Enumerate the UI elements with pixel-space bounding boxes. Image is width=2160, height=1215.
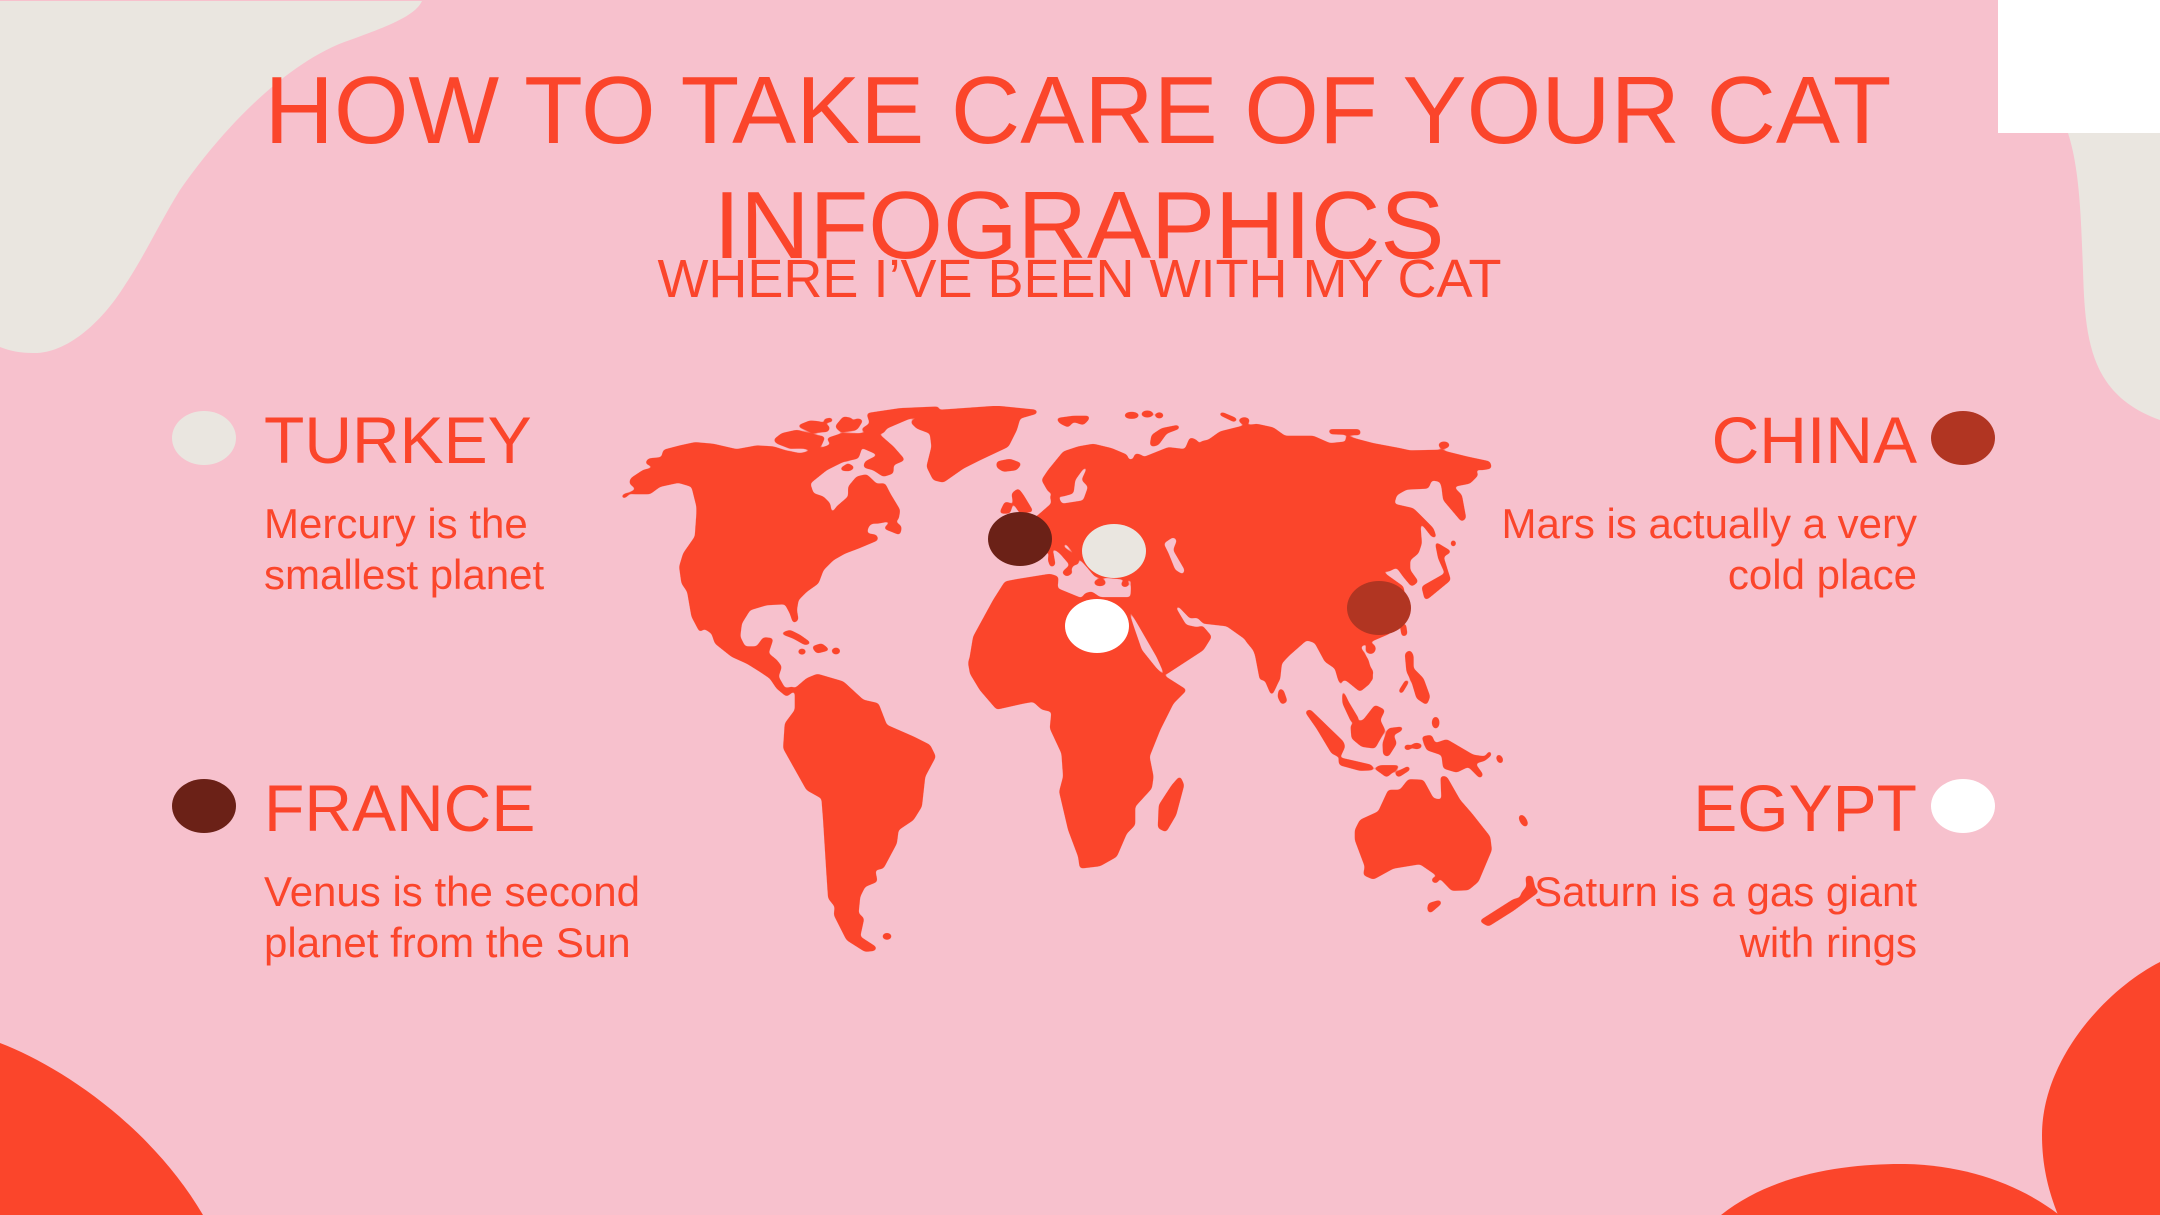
title: INFOGRAPHICS bbox=[714, 172, 1444, 279]
description: france: Venus is the second bbox=[264, 868, 640, 915]
south and southeast asia, oceania bbox=[1245, 640, 1539, 926]
world map bbox=[621, 406, 1539, 952]
madagascar bbox=[1158, 776, 1184, 832]
description: egypt: with rings bbox=[1739, 919, 1917, 966]
map marker: turkey bbox=[1082, 524, 1146, 578]
legend dot: france bbox=[172, 779, 236, 833]
description: egypt bbox=[1534, 868, 1917, 966]
blob: top left beige bbox=[0, 1, 422, 353]
description: turkey: smallest planet bbox=[264, 551, 544, 598]
java bbox=[1338, 757, 1374, 771]
map marker: china bbox=[1347, 581, 1411, 635]
panel: egypt bbox=[1534, 771, 1995, 966]
map marker: egypt bbox=[1065, 599, 1129, 653]
white rectangle top right bbox=[1998, 0, 2160, 133]
panel: france bbox=[172, 771, 640, 966]
blob: bottom left red bbox=[0, 1043, 203, 1215]
indochina and malay peninsula bbox=[1313, 640, 1373, 723]
north america and greenland bbox=[621, 406, 1037, 697]
eurasia and north africa bbox=[968, 411, 1492, 680]
hainan bbox=[1366, 643, 1376, 654]
blob: right beige bbox=[2068, 133, 2160, 420]
australia bbox=[1355, 776, 1492, 891]
description: china: cold place bbox=[1728, 551, 1917, 598]
heading: china: CHINA bbox=[1712, 403, 1917, 477]
description: france bbox=[264, 868, 640, 966]
heading: egypt: EGYPT bbox=[1693, 771, 1917, 845]
taiwan bbox=[1400, 623, 1407, 637]
caribbean bbox=[780, 630, 840, 655]
blob: bottom right red bbox=[2042, 962, 2160, 1215]
description: turkey: Mercury is the bbox=[264, 500, 528, 547]
south america and africa south bbox=[783, 660, 1187, 952]
subtitle: WHERE I’VE BEEN WITH MY CAT bbox=[657, 249, 1502, 309]
legend dot: turkey bbox=[172, 411, 236, 465]
description: egypt: Saturn is a gas giant bbox=[1534, 868, 1917, 915]
legend dot: china bbox=[1931, 411, 1995, 465]
panel: china bbox=[1502, 403, 1995, 598]
title bbox=[265, 57, 1891, 279]
description: china: Mars is actually a very bbox=[1502, 500, 1917, 547]
sulawesi bbox=[1383, 727, 1403, 757]
description: china bbox=[1502, 500, 1917, 598]
mediterranean islands bbox=[1048, 550, 1129, 587]
lesser sunda islands bbox=[1374, 765, 1401, 777]
new zealand bbox=[1479, 876, 1539, 926]
title: HOW TO TAKE CARE OF YOUR CAT bbox=[265, 57, 1891, 164]
heading: france: FRANCE bbox=[264, 771, 535, 845]
description: france: planet from the Sun bbox=[264, 919, 631, 966]
legend dot: egypt bbox=[1931, 779, 1995, 833]
new guinea bbox=[1422, 735, 1492, 778]
british isles bbox=[999, 488, 1033, 513]
arctic islands bbox=[1056, 411, 1450, 448]
heading: turkey: TURKEY bbox=[264, 403, 532, 477]
sumatra bbox=[1305, 709, 1345, 757]
japan bbox=[1422, 542, 1452, 600]
blob: bottom centre-right red bbox=[1721, 1164, 2058, 1215]
borneo bbox=[1351, 705, 1385, 748]
description: turkey bbox=[264, 500, 544, 598]
india bbox=[1245, 640, 1303, 696]
tasmania bbox=[1427, 900, 1442, 913]
map marker: france bbox=[988, 512, 1052, 566]
philippines bbox=[1405, 650, 1430, 705]
moluccas bbox=[1404, 717, 1439, 750]
panel: turkey bbox=[172, 403, 544, 598]
